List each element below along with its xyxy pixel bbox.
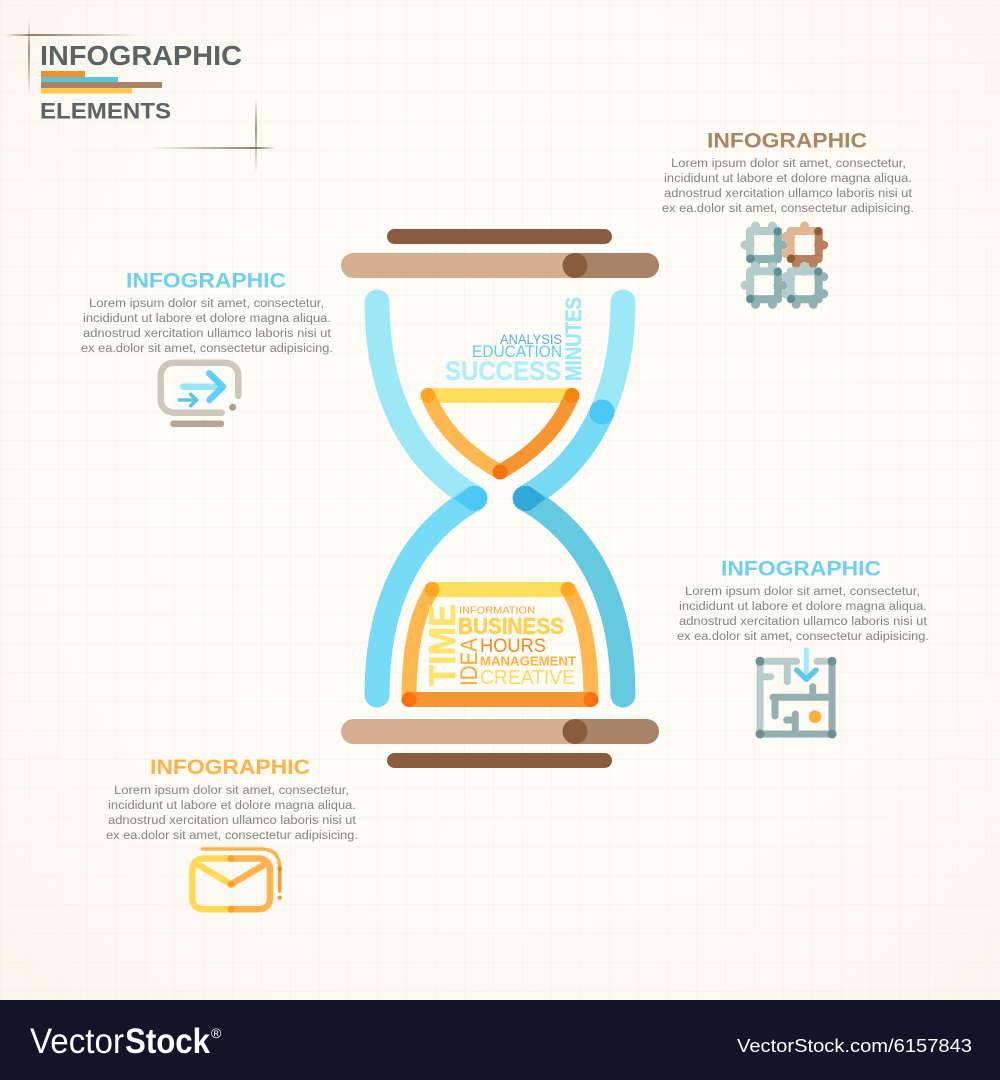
heading: INFOGRAPHIC [707, 128, 867, 152]
icon: puzzle gears [745, 226, 824, 304]
top word cloud: MINUTES [561, 297, 586, 381]
title: elements: ELEMENTS [40, 98, 171, 124]
bottom word cloud: BUSINESS [458, 613, 564, 639]
icon: maze with arrow [756, 650, 836, 738]
title colour bars [41, 71, 162, 94]
body text [662, 158, 914, 215]
bottom word cloud: TIME [422, 604, 463, 686]
glass body [377, 302, 623, 695]
body text: Lorem ipsum dolor sit amet, consectetur, [685, 586, 920, 598]
bottom word cloud: CREATIVE [480, 666, 575, 689]
top word cloud: SUCCESS [445, 356, 561, 386]
footer band [0, 1000, 1000, 1080]
bottom sand [402, 582, 598, 707]
body text: incididunt ut labore et dolore magna aliqua. [83, 313, 331, 325]
panel: top right text [662, 128, 914, 215]
top sand [420, 388, 580, 480]
top word cloud [445, 297, 586, 386]
gear bottom left [745, 266, 783, 304]
bottom word cloud [422, 604, 576, 689]
body text: adnostrud xercitation ullamco laboris nisi ut [83, 328, 332, 340]
hourglass [341, 229, 659, 768]
gear bottom right [786, 266, 824, 304]
body text: ex ea.dolor sit amet, consectetur adipisicing. [106, 830, 358, 842]
title: infographic: INFOGRAPHIC [40, 40, 242, 71]
body text: ex ea.dolor sit amet, consectetur adipisicing. [662, 203, 914, 215]
heading: INFOGRAPHIC [150, 755, 310, 779]
body text: incididunt ut labore et dolore magna aliqua. [679, 601, 927, 613]
footer logo [30, 1022, 222, 1061]
panel: right middle text [677, 556, 929, 643]
title block [40, 40, 242, 124]
bottom word cloud: HOURS [480, 636, 546, 657]
body text: incididunt ut labore et dolore magna aliqua. [664, 173, 912, 185]
footer url: VectorStock.com/6157843 [737, 1036, 972, 1056]
body text: adnostrud xercitation ullamco laboris nisi ut [679, 616, 928, 628]
icon: envelope [192, 849, 282, 913]
body text [677, 586, 929, 643]
footer logo: Stock [125, 1022, 210, 1061]
body text: ex ea.dolor sit amet, consectetur adipisicing. [677, 631, 929, 643]
top cap [341, 229, 659, 278]
body text: ex ea.dolor sit amet, consectetur adipisicing. [81, 343, 333, 355]
top word cloud: ANALYSIS [500, 331, 562, 347]
bottom cap [341, 719, 659, 768]
heading: INFOGRAPHIC [126, 268, 286, 292]
body text: Lorem ipsum dolor sit amet, consectetur, [671, 158, 906, 170]
gear top right [786, 226, 824, 264]
heading: INFOGRAPHIC [721, 556, 881, 580]
body text: incididunt ut labore et dolore magna aliqua. [108, 800, 356, 812]
crosshair marks around title [5, 20, 276, 174]
footer logo: Vector [30, 1022, 124, 1061]
top word cloud: EDUCATION [472, 343, 562, 361]
body text: Lorem ipsum dolor sit amet, consectetur, [114, 785, 349, 797]
body text: adnostrud xercitation ullamco laboris nisi ut [664, 188, 913, 200]
panel: left upper text [81, 268, 333, 355]
icon: monitor with arrows [161, 363, 238, 424]
body text: Lorem ipsum dolor sit amet, consectetur, [89, 298, 324, 310]
body text [81, 298, 333, 355]
panel: left lower text [106, 755, 358, 842]
footer logo: ® [211, 1025, 222, 1041]
body text: adnostrud xercitation ullamco laboris nisi ut [108, 815, 357, 827]
body text [106, 785, 358, 842]
bottom word cloud: IDEA [456, 638, 483, 686]
bottom word cloud: MANAGEMENT [480, 654, 576, 668]
gear top left [745, 226, 783, 264]
bottom word cloud: INFORMATION [459, 604, 535, 616]
